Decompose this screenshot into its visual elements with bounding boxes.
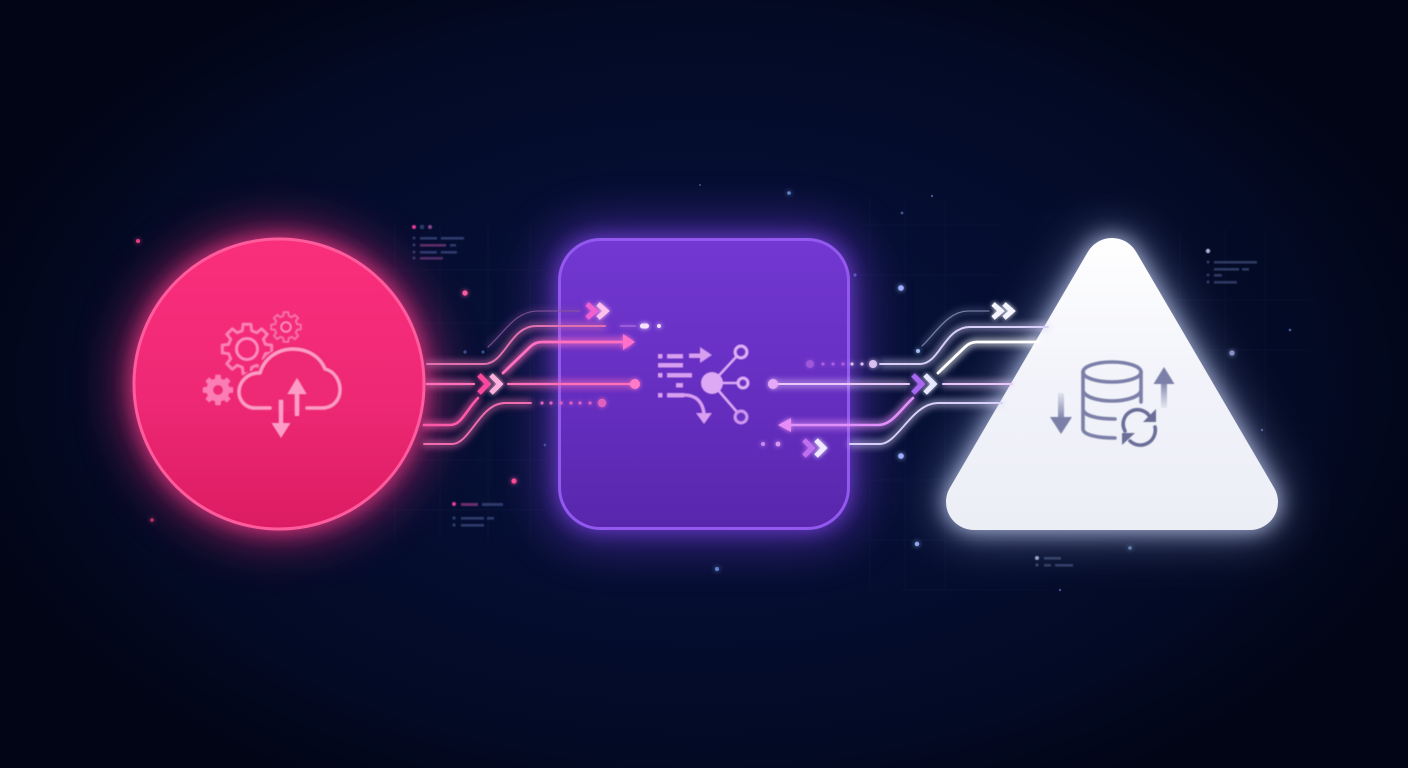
connectors: purple into triangle [775, 311, 1048, 444]
ambient glows [121, 226, 1250, 542]
icon: cloud with gears and sync arrows [203, 312, 340, 438]
icon: routing hub [658, 346, 748, 424]
code snippet: bottom left [452, 502, 503, 527]
code snippet: top right [1206, 249, 1257, 284]
background grid [345, 200, 1310, 590]
arrow and nodes: pink connectors [540, 324, 661, 407]
connectors: pink into purple [424, 311, 632, 444]
particles [136, 184, 1291, 591]
panel: pink circle [132, 237, 426, 531]
arrow and nodes: purple connectors [761, 349, 920, 446]
panel: white triangle [974, 266, 1250, 502]
code snippet: top left [412, 225, 464, 260]
chevrons: pink connector [479, 304, 606, 393]
code snippet: bottom right [1035, 556, 1073, 567]
chevrons: purple connector [804, 304, 1012, 456]
panel: purple rounded square [558, 238, 850, 530]
icon: database with sync arrows [1050, 362, 1174, 445]
